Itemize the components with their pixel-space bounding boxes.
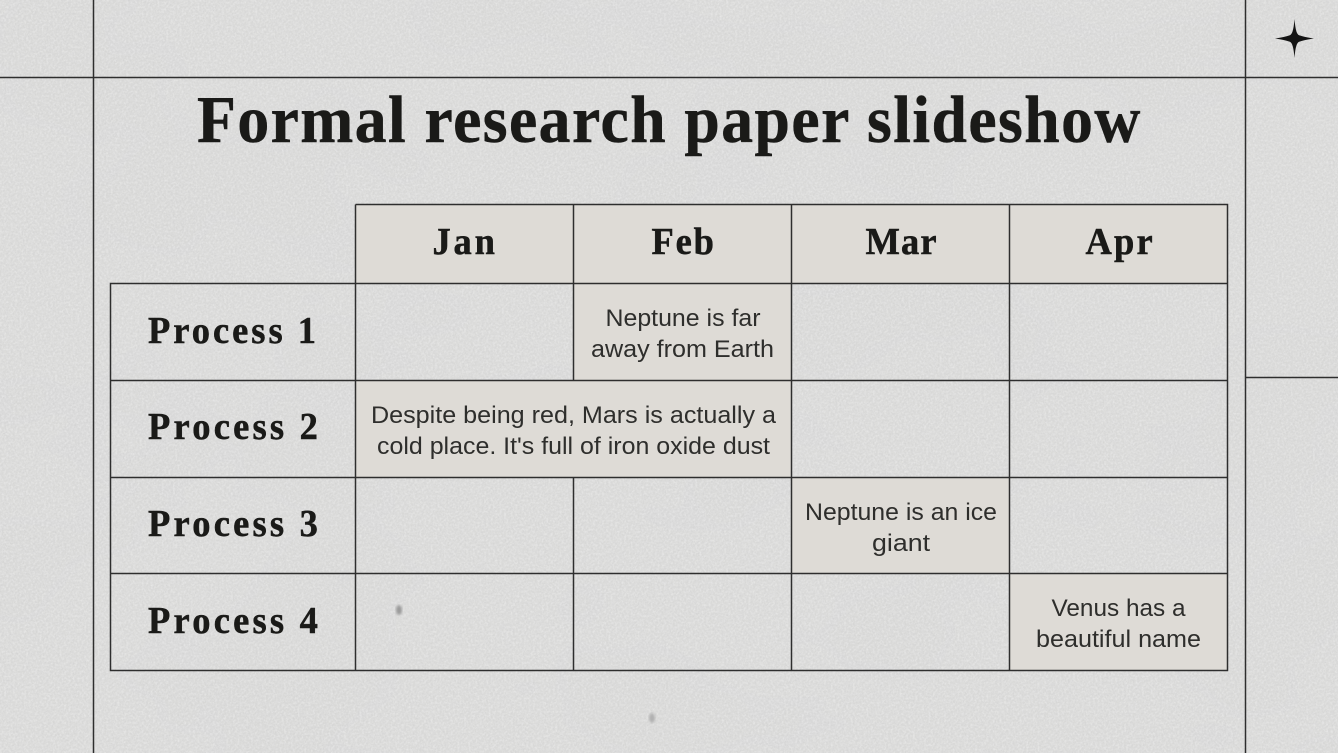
task: Neptune is an ice giant: giant xyxy=(872,530,930,557)
task: Venus has a beautiful name: Venus has a xyxy=(1052,595,1186,622)
header: Feb: Feb xyxy=(652,221,714,263)
icon: four-point star xyxy=(1275,19,1314,58)
row label: Process 2: Process 2 xyxy=(148,406,318,448)
task: Mars is actually a cold place: Despite being red, Mars is actually a xyxy=(371,402,777,429)
month header cells xyxy=(356,204,1228,284)
row label: Process 4: Process 4 xyxy=(148,600,318,642)
header: Jan: Jan xyxy=(432,221,495,263)
task: Neptune is an ice giant xyxy=(792,478,1010,574)
task: Neptune is an ice giant: Neptune is an ice xyxy=(805,499,997,526)
task: Neptune is far away from Earth: Neptune is far xyxy=(606,305,760,332)
task: Neptune is far away from Earth: away from Earth xyxy=(591,336,774,363)
title: Formal research paper slideshow xyxy=(197,84,1140,157)
header: Apr: Apr xyxy=(1086,221,1153,263)
row label: Process 1: Process 1 xyxy=(148,310,316,352)
header: Mar: Mar xyxy=(866,221,937,263)
schedule table xyxy=(110,204,1228,670)
task: Venus has a beautiful name: beautiful name xyxy=(1036,626,1201,653)
table grid xyxy=(110,204,1228,670)
task: Venus has a beautiful name xyxy=(1010,574,1228,670)
task: Neptune is far away from Earth xyxy=(574,284,792,380)
task: Mars is actually a cold place xyxy=(356,380,792,478)
task: Mars is actually a cold place: cold place. It's full of iron oxide dust xyxy=(377,433,770,460)
row label: Process 3: Process 3 xyxy=(148,503,318,545)
